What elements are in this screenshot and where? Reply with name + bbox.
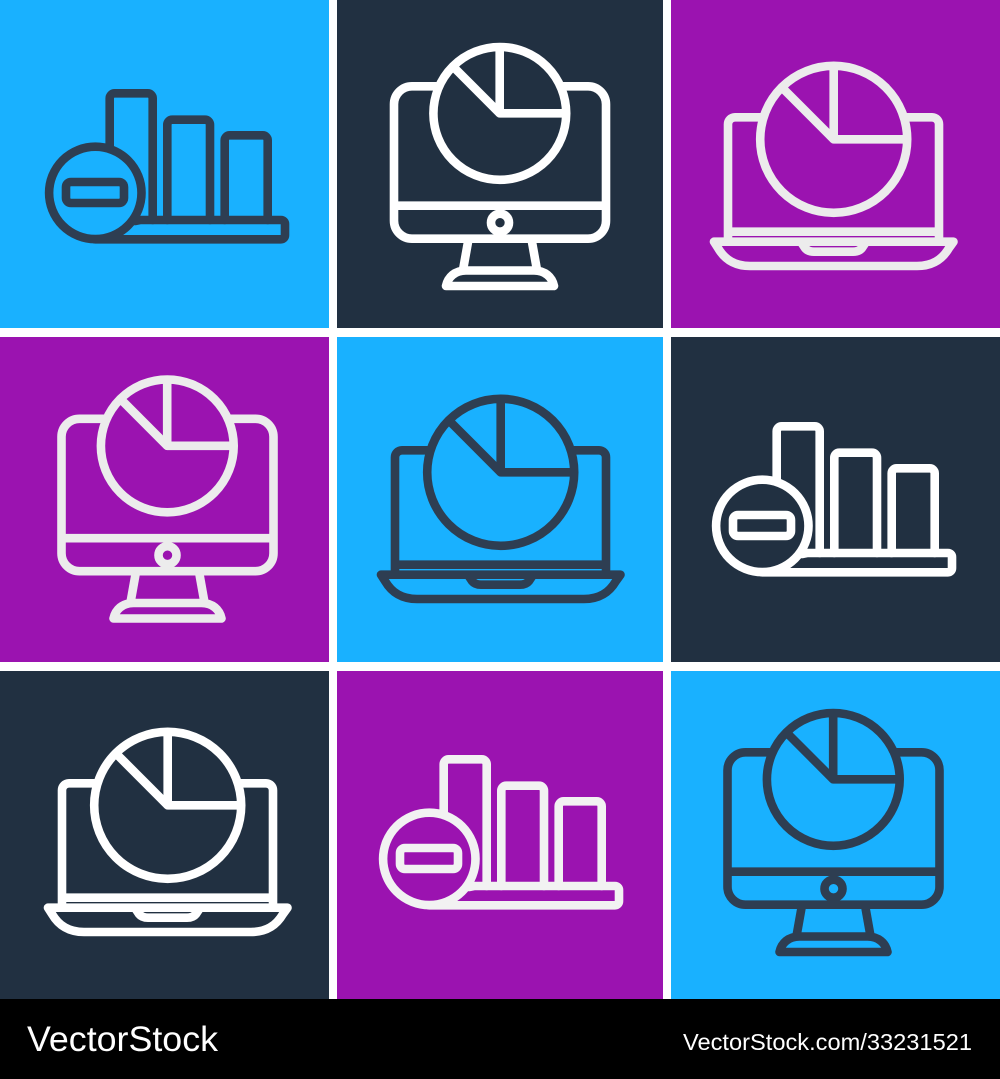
icon: monitor with pie chart, tile 9 <box>728 713 940 952</box>
footer image id: VectorStock.com/33231521 <box>683 1029 972 1055</box>
icon: monitor with pie chart, tile 4 <box>62 380 274 618</box>
icon: bar chart with minus, tile 1 <box>49 93 285 239</box>
icon: laptop with pie chart, tile 3 <box>714 66 954 266</box>
panel: tile 2 navy background <box>337 0 663 328</box>
footer bar <box>0 999 1000 1079</box>
panel: tile 6 navy background <box>671 337 1000 662</box>
icon: monitor with pie chart, tile 2 <box>394 47 606 286</box>
panel: tile 8 purple background <box>337 671 663 999</box>
icon: laptop with pie chart, tile 5 <box>381 399 620 599</box>
panel: tile 1 blue background <box>0 0 329 328</box>
panel: tile 7 navy background <box>0 671 329 999</box>
icon: bar chart with minus, tile 8 <box>383 759 619 905</box>
panel: tile 5 blue background <box>337 337 663 662</box>
panel: tile 3 purple background <box>671 0 1000 328</box>
icon: bar chart with minus, tile 6 <box>716 426 952 572</box>
footer brand name: VectorStock <box>27 1019 218 1059</box>
panel: tile 9 blue background <box>671 671 1000 999</box>
icon: laptop with pie chart, tile 7 <box>48 732 288 932</box>
panel: tile 4 purple background <box>0 337 329 662</box>
